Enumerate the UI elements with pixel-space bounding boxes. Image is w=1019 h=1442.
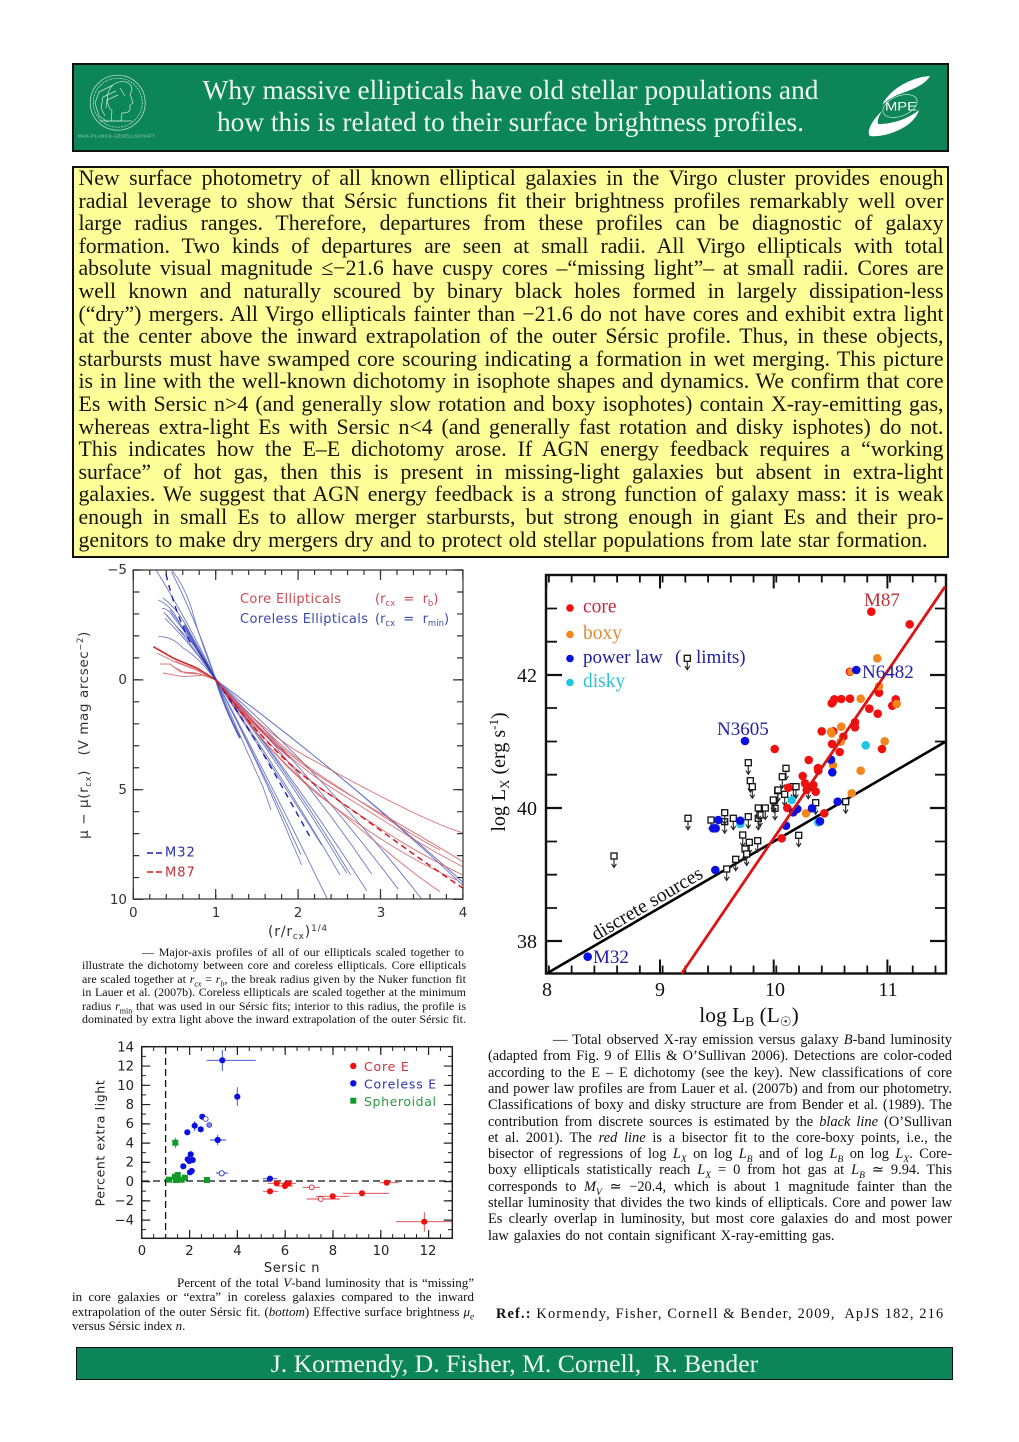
- y-axis label: log L: [488, 789, 510, 832]
- body text panel: enough in small Es to allow merger starbursts, but strong enough in giant Es and their pro-: [78, 505, 944, 529]
- tick labels: 10: [117, 1079, 134, 1094]
- legend: M87: M87: [165, 866, 196, 880]
- tick labels: [517, 665, 898, 1001]
- caption: X-ray figure: and power law profiles are from Lauer et al. (2007b) and from our photometry.: [488, 1081, 952, 1097]
- tick labels: 4: [459, 905, 467, 921]
- key: power law: [566, 647, 746, 668]
- key: disky: disky: [583, 671, 626, 692]
- caption: profiles figure: [82, 945, 466, 1026]
- legend: core ellipticals: [240, 592, 438, 609]
- tick labels: 12: [117, 1060, 134, 1074]
- caption: profiles figure: are scaled together at rcx = rb, the break radius given by the Nuker function fit: [82, 972, 466, 988]
- body text panel: galaxies. We suggest that AGN energy feedback is a strong function of galaxy mass: it is weak: [78, 482, 944, 506]
- legend: core E: Core E: [364, 1059, 410, 1074]
- label N6482: N6482: [862, 662, 914, 683]
- tick labels: 2: [294, 905, 302, 921]
- error bars: [195, 1050, 277, 1179]
- legend: coreless E: Coreless E: [364, 1076, 437, 1092]
- legend: M32: M32: [165, 846, 196, 860]
- caption: profiles figure: radius rmin that was used in our Sérsic fits; interior to this radius, the profile is: [82, 999, 466, 1015]
- discrete sources line: [547, 742, 945, 974]
- legend: coreless ellipticals: cx: [385, 619, 395, 629]
- profile curves: coreless ellipticals: [156, 570, 463, 899]
- legend: M87: [147, 866, 196, 880]
- body text panel: at the center above the inward extrapolation of the outer Sérsic profile. Thus, in these objects,: [78, 324, 944, 348]
- tick labels: 3: [377, 905, 385, 921]
- y-axis label: Percent extra light: [92, 1080, 108, 1206]
- body text panel: formation. Two kinds of departures are seen at small radii. All Virgo ellipticals with total: [78, 234, 944, 258]
- tick labels: 4: [233, 1244, 242, 1259]
- disky points: [736, 741, 870, 828]
- caption: X-ray figure: corresponds to MV ≃ −20.4, which is about 1 magnitude fainter than the: [488, 1179, 952, 1198]
- tick labels: 6: [281, 1244, 289, 1259]
- tick labels: 10: [110, 892, 127, 908]
- tick labels: 2: [126, 1156, 134, 1170]
- legend: coreless ellipticals: min: [428, 619, 444, 629]
- upper limit markers: [611, 655, 849, 880]
- caption: X-ray figure: contribution from discrete sources is estimated by the black line (O’Sullivan: [488, 1114, 952, 1130]
- caption: X-ray figure: et al. 2001). The red line is a bisector fit to the core-boxy points, i.e., the: [488, 1130, 952, 1146]
- tick labels: 10: [373, 1244, 389, 1259]
- axes frame and ticks: [133, 569, 464, 900]
- legend: core ellipticals: ): [433, 592, 438, 607]
- axes frame and ticks: [141, 1046, 453, 1239]
- frame and ticks: [546, 575, 946, 974]
- M87 profile dashed: [216, 680, 463, 888]
- key: power law: power law: [583, 647, 663, 668]
- x-axis label: (L: [754, 1003, 780, 1027]
- caption: profiles figure: in Lauer et al. (2007b). Coreless ellipticals are scaled together at the minimum: [82, 985, 466, 999]
- legend: spheroidal: Spheroidal: [364, 1094, 437, 1109]
- key: power law: (: [675, 647, 681, 668]
- y-axis label: X: [497, 779, 512, 789]
- key: core: core: [583, 596, 617, 618]
- x-axis label: 1/4: [311, 924, 328, 934]
- y-axis label: (erg s: [488, 730, 510, 779]
- label discrete sources: discrete sources: [587, 862, 707, 945]
- tick labels: 38: [517, 931, 537, 953]
- y-axis label: -1: [486, 719, 501, 730]
- y-axis label: ): [76, 631, 92, 637]
- chart: scaled surface brightness profiles: [76, 562, 467, 942]
- caption: extra light figure: in core galaxies or “extra” in coreless galaxies compared to the inward: [72, 1289, 474, 1304]
- icon: Max Planck Minerva seal: [78, 75, 155, 138]
- tick labels: 0: [138, 1244, 146, 1259]
- caption: X-ray figure: law galaxies do not contain significant X-ray-emitting gas.: [488, 1228, 834, 1244]
- power law points: [583, 666, 861, 961]
- legend: coreless ellipticals: ): [444, 612, 449, 627]
- label N3605: N3605: [717, 719, 769, 740]
- caption: extra light figure: versus Sérsic index n.: [72, 1318, 185, 1333]
- tick labels: 14: [117, 1040, 134, 1056]
- footer banner: authors: [76, 1347, 953, 1380]
- legend: coreless ellipticals: Coreless Ellipticals: [240, 612, 368, 627]
- tick labels: 0: [118, 672, 127, 688]
- core points: [770, 607, 914, 843]
- body text panel: (“dry”) mergers. All Virgo ellipticals fainter than −21.6 do not have cores and exhibit extra light: [78, 302, 944, 326]
- caption: X-ray figure: stellar luminosity that divides the two kinds of ellipticals. Core and power law: [488, 1195, 952, 1211]
- header banner: [72, 63, 949, 152]
- legend: coreless ellipticals: (r: [375, 612, 385, 627]
- body text panel: Es with Sersic n>4 (and generally slow rotation and boxy isophotes) contain X-ray-emitting gas,: [78, 392, 944, 416]
- x-axis label: (r/r: [268, 924, 293, 940]
- body text panel: This indicates how the E–E dichotomy arose. If AGN energy feedback requires a “working: [78, 437, 944, 461]
- tick labels: 9: [655, 979, 665, 1001]
- x-axis label: cx: [293, 932, 305, 942]
- x-axis label: ): [792, 1003, 799, 1027]
- body text panel: well known and naturally scoured by binary black holes formed in largely dissipation-less: [78, 279, 944, 303]
- caption: X-ray figure: — Total observed X-ray emission versus galaxy B-band luminosity: [553, 1032, 952, 1048]
- body text panel: surface” of hot gas, then this is present in missing-light galaxies but absent in extra-light: [78, 460, 944, 484]
- tick labels: 2: [185, 1244, 194, 1259]
- caption: profiles figure: dominated by extra light above the inward extrapolation of the outer Sérsic fit.: [82, 1012, 466, 1026]
- x-axis label: ☉: [780, 1015, 792, 1030]
- body text panel: genitors to make dry mergers dry and to protect old stellar populations from late star formation.: [78, 528, 928, 552]
- tick labels: [115, 1040, 436, 1259]
- y-axis label: μ − μ(r: [76, 787, 92, 839]
- tick labels: −2: [115, 1194, 134, 1209]
- tick labels: 42: [517, 665, 537, 687]
- icon: Max Planck Minerva seal: MAX-PLANCK-GESELLSCHAFT: [78, 134, 155, 138]
- legend: core ellipticals: = r: [395, 592, 429, 607]
- y-axis label: ): [488, 712, 510, 719]
- tick labels: 6: [126, 1117, 134, 1132]
- tick labels: 0: [129, 905, 138, 921]
- boxy points: [802, 654, 901, 818]
- label M87: M87: [864, 590, 900, 611]
- chart: percent extra light vs Sersic n: [92, 1040, 453, 1276]
- y-axis label: −2: [76, 637, 86, 651]
- caption: X-ray figure: (adapted from Fig. 9 of Ellis & O’Sullivan 2006). Detections are color-coded: [488, 1048, 952, 1064]
- legend: M32: [147, 846, 196, 860]
- reference line: Ref.: Kormendy, Fisher, Cornell & Bender, 2009, ApJS 182, 216: [496, 1306, 944, 1322]
- tick labels: 40: [517, 798, 537, 820]
- key: boxy: [566, 623, 622, 644]
- body text panel: absolute visual magnitude ≤−21.6 have cuspy cores –“missing light”– at small radii. Cores are: [78, 256, 944, 280]
- legend: core ellipticals: cx: [385, 599, 395, 609]
- caption: X-ray figure: boxy ellipticals statistically reach LX = 0 from hot gas at LB ≃ 9.94. This: [488, 1162, 952, 1181]
- x-axis label: ): [305, 924, 311, 940]
- label M32: M32: [593, 947, 629, 968]
- tick labels: 1: [212, 905, 220, 921]
- profile curves: core ellipticals: [157, 653, 463, 892]
- zero and n=1 dashed lines: [142, 1047, 452, 1238]
- footer banner: authors: J. Kormendy, D. Fisher, M. Cornell, R. Bender: [271, 1349, 758, 1378]
- body text panel: starbursts must have swamped core scouring indicating a formation in wet merging. This picture: [78, 347, 944, 371]
- caption: extra light figure: [72, 1275, 474, 1333]
- icon: MPE logo: MPE: [885, 100, 917, 114]
- icon: MPE logo: [869, 76, 930, 136]
- title: [202, 75, 818, 137]
- body text panel: whereas extra-light Es with Sersic n<4 (and generally fast rotation and disky isphotes) do not.: [78, 415, 944, 439]
- x-axis label: Sersic n: [264, 1261, 320, 1276]
- key: boxy: boxy: [583, 623, 622, 644]
- y-axis label: ) (V mag arcsec: [76, 651, 92, 776]
- key: core: [566, 596, 617, 618]
- caption: X-ray figure: Classifications of boxy and disky structure are from Bender et al. (1989). The: [488, 1097, 952, 1113]
- caption: X-ray figure: according to the E – E dichotomy (see the key). New classifications of core: [488, 1065, 952, 1081]
- caption: extra light figure: Percent of the total V-band luminosity that is “missing”: [177, 1275, 474, 1290]
- spheroidal points: [166, 1138, 210, 1183]
- tick labels: −4: [115, 1214, 134, 1228]
- tick labels: 8: [542, 979, 552, 1001]
- body text panel: large radius ranges. Therefore, departures from these profiles can be diagnostic of galaxy: [78, 211, 944, 235]
- tick labels: 10: [765, 979, 785, 1001]
- tick labels: 4: [126, 1136, 134, 1152]
- caption: X-ray figure: Es clearly overlap in luminosity, but most core galaxies do and most power: [488, 1211, 952, 1227]
- legend: core ellipticals: (r: [375, 592, 385, 607]
- bisector fit line: [682, 587, 945, 974]
- chart: X-ray luminosity vs B-band luminosity: [486, 575, 946, 1030]
- caption: X-ray figure: [488, 1032, 952, 1244]
- tick labels: 8: [329, 1244, 337, 1259]
- legend: core ellipticals: Core Ellipticals: [240, 592, 341, 607]
- title: how this is related to their surface brightness profiles.: [217, 107, 804, 137]
- x-axis label: log L: [699, 1003, 745, 1027]
- caption: profiles figure: illustrate the dichotomy between core and coreless ellipticals. Core ellipticals: [82, 958, 466, 972]
- caption: profiles figure: — Major-axis profiles of all of our ellipticals scaled together to: [142, 945, 464, 959]
- tick labels: 12: [420, 1244, 436, 1259]
- body text panel: radial leverage to show that Sérsic functions fit their brightness profiles remarkably well over: [78, 189, 944, 213]
- key: power law: limits): [696, 647, 746, 668]
- body text panel: [72, 166, 949, 558]
- tick labels: −5: [107, 562, 127, 578]
- title: Why massive ellipticals have old stellar populations and: [203, 75, 818, 105]
- M32 profile dashed: [165, 570, 311, 838]
- y-axis label: cx: [84, 776, 94, 787]
- legend: coreless ellipticals: = r: [395, 612, 429, 627]
- legend: core ellipticals: b: [428, 599, 433, 609]
- body text panel: is in line with the well-known dichotomy in isophote shapes and dynamics. We confirm that core: [78, 369, 944, 393]
- tick labels: 5: [118, 782, 127, 798]
- x-axis label: B: [745, 1014, 754, 1029]
- tick labels: 11: [878, 979, 898, 1001]
- caption: X-ray figure: bisector of regressions of log LX on log LB and of log LB on log LX. Core-: [488, 1146, 952, 1165]
- core points: [267, 1180, 427, 1225]
- body text panel: New surface photometry of all known elliptical galaxies in the Virgo cluster provides enough: [78, 166, 944, 190]
- tick labels: 8: [126, 1098, 134, 1113]
- caption: extra light figure: extrapolation of the outer Sérsic fit. (bottom) Effective surface brightness μe: [72, 1304, 474, 1321]
- legend: coreless ellipticals: [240, 612, 449, 629]
- tick labels: 0: [126, 1175, 134, 1190]
- coreless points: [180, 1057, 273, 1182]
- tick labels: [107, 562, 467, 921]
